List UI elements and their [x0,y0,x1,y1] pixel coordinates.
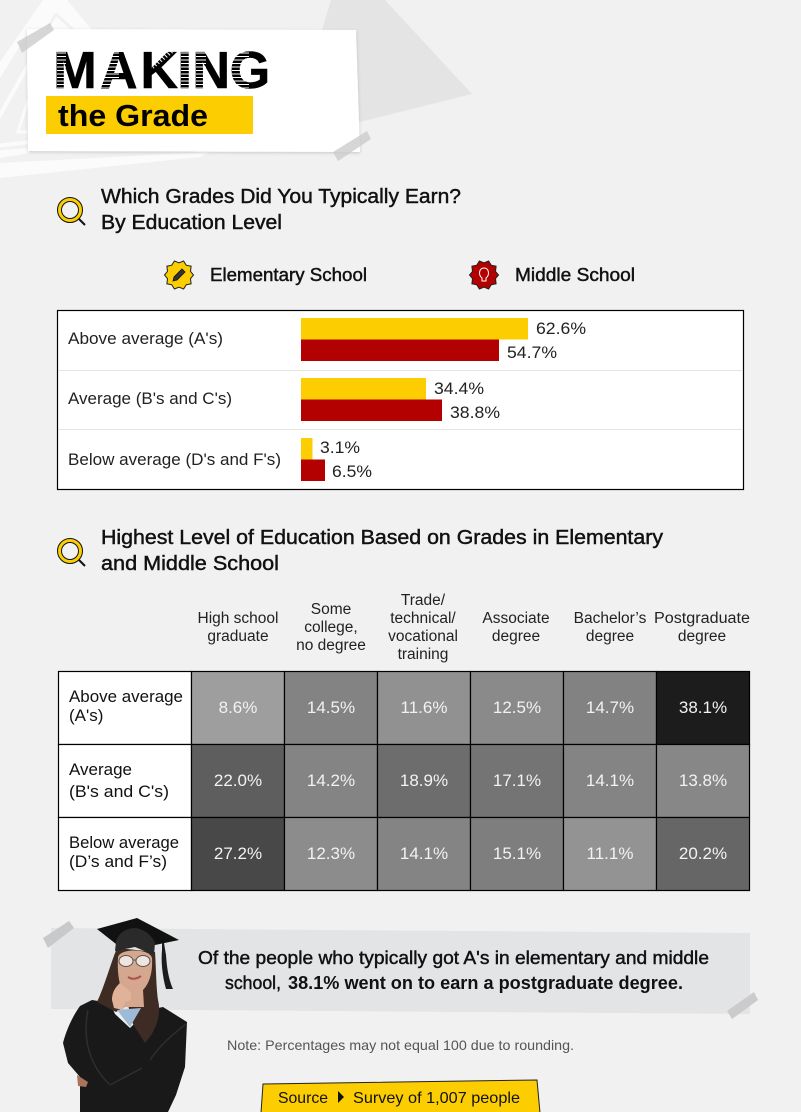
legend label: elementary school: Elementary School [210,265,367,285]
row: above average [68,318,586,362]
hair [97,948,159,1043]
row: above average: Above average (A's) [68,329,223,348]
table column headers: technical/ [390,610,456,627]
heatmap table [58,672,750,890]
table values: 14.5% [307,698,355,717]
table row label text: Average [69,760,132,779]
mouth [128,976,141,979]
row: above average: 54.7% [507,343,557,362]
table values: 14.1% [586,771,634,790]
table column headers: Some [311,601,351,618]
table column headers: Bachelor’s [574,610,647,627]
table column headers [198,592,750,663]
table row label text: (D’s and F’s) [69,852,167,871]
row 1 cells [192,672,750,744]
table row label text: Below average [69,833,179,852]
table column headers: college, [304,619,358,636]
icon: magnifier 2 [60,540,85,566]
table column headers: High school [198,610,278,627]
hand at waist [77,1075,88,1087]
callout text: school, [225,972,281,993]
row 3 cells [192,818,750,890]
row: average: Average (B's and C's) [68,389,232,408]
legend label: middle school: Middle School [515,265,635,285]
table values: 27.2% [214,844,262,863]
tape: callout bottom right [727,992,758,1019]
row labels [58,672,192,890]
table values: 11.1% [587,844,633,863]
tape: top left [17,23,54,53]
table values [214,698,727,863]
table column headers: graduate [207,628,269,645]
source tag: Source [278,1090,328,1107]
table column headers: degree [586,628,634,645]
title: the Grade: the Grade [58,98,208,133]
heading: highest level of education: and Middle School [101,553,279,575]
table column headers: degree [678,628,726,645]
table row label text: (A's) [69,706,103,725]
row: average [68,378,500,422]
cap [97,918,179,989]
row: below average: Below average (D's and F's) [68,450,281,469]
row: below average [68,438,372,481]
hand [112,983,131,1010]
table row label text [69,687,183,871]
tape: bottom right [333,131,371,161]
callout text: Of the people who typically got A's in elementary and middle [198,947,709,968]
table values: 15.1% [493,844,541,863]
background triangles [0,0,472,178]
tassel [162,943,173,989]
face and neck [118,950,152,1007]
row: average: 38.8% [450,403,500,422]
legend [164,261,635,289]
table values: 12.5% [493,698,541,717]
robe folds [86,1010,186,1085]
heading: highest level of education [101,527,663,575]
title: the Grade [46,96,253,134]
callout text: 38.1% went on to earn a postgraduate degree. [288,972,683,993]
glasses [119,956,150,966]
table values: 13.8% [679,771,727,790]
table values: 8.6% [219,698,257,717]
heading: grades by education level: Which Grades Did You Typically Earn? [101,186,461,208]
source tag: Survey of 1,007 people [353,1090,520,1107]
row 2 cells [192,744,750,818]
note: Note: Percentages may not equal 100 due to rounding. [227,1037,574,1053]
table column headers: Postgraduate [654,610,750,627]
table values: 18.9% [400,771,448,790]
title: MAKING: MAKING [53,42,270,100]
icon: light bulb badge [470,261,498,289]
table values: 14.1% [400,844,448,863]
tape: callout top left [43,921,74,948]
row: above average: 62.6% [536,319,586,338]
source tag [261,1080,540,1112]
table column headers: no degree [296,637,366,654]
table values: 38.1% [679,698,727,717]
table values: 11.6% [401,698,447,717]
callout panel [43,921,758,1019]
table values: 14.2% [307,771,355,790]
robe [63,1000,187,1112]
table values: 14.7% [586,698,634,717]
title card [17,23,371,161]
heading: grades by education level: By Education Level [101,212,282,234]
table column headers: training [398,646,448,663]
table values: 12.3% [307,844,355,863]
arrow [338,1091,344,1103]
table values: 17.1% [493,771,541,790]
table column headers: vocational [388,628,458,645]
bar chart panel [58,310,744,490]
heading: grades by education level [101,186,461,234]
graduate illustration [63,918,187,1112]
callout text [198,947,709,993]
row: average: 34.4% [434,379,484,398]
table row label text: (B's and C's) [69,782,169,801]
row: below average: 6.5% [332,462,372,481]
icon: pencil badge [164,261,194,289]
row: below average: 3.1% [320,438,360,457]
table values: 22.0% [214,771,262,790]
icon: magnifier 1 [60,200,85,225]
table row label text: Above average [69,687,183,706]
table column headers: Trade/ [401,592,446,609]
heading: highest level of education: Highest Level of Education Based on Grades in Elementary [101,527,663,549]
table values: 20.2% [679,844,727,863]
table column headers: degree [492,628,540,645]
table column headers: Associate [482,610,550,627]
shirt collar [117,1008,141,1027]
